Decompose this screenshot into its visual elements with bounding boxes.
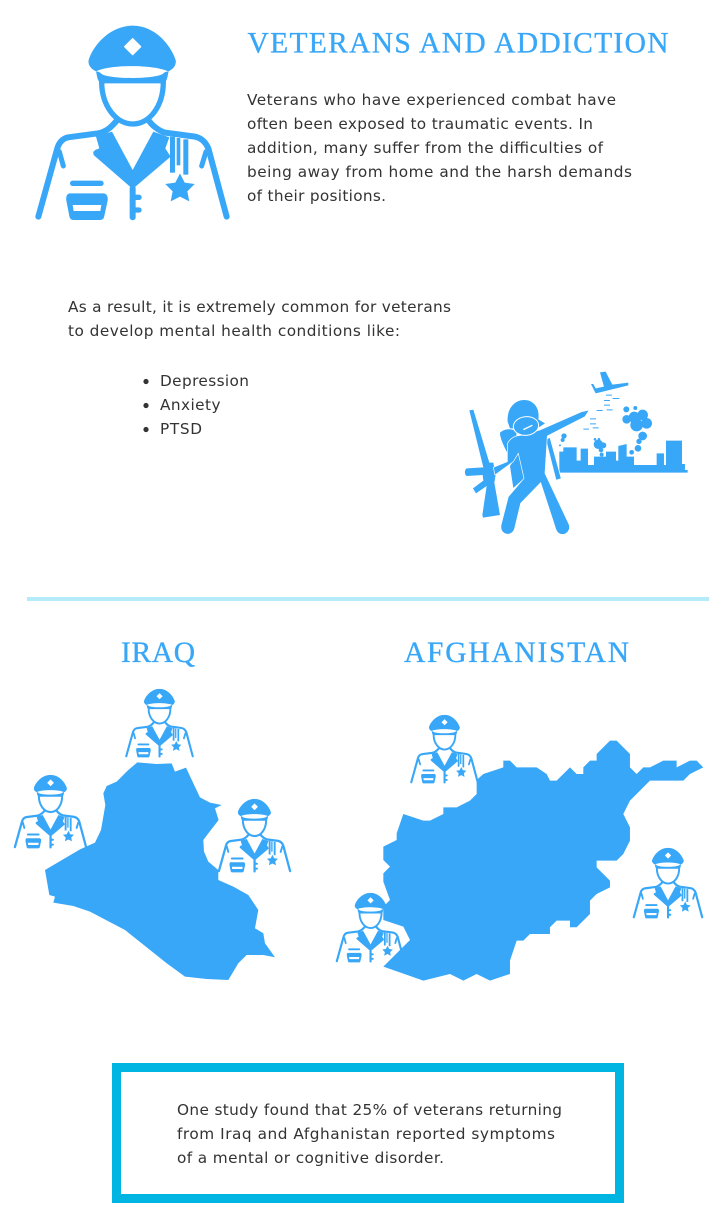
bag strip — [546, 437, 561, 480]
divider line — [27, 597, 709, 601]
text block: combat exposure: often been exposed to traumatic events. In — [247, 115, 593, 133]
heading: Afghanistan: AFGHANISTAN — [404, 637, 629, 669]
callout: study finding: One study found that 25% of veterans returning — [177, 1101, 562, 1119]
icon: soldier pointing at bombed city — [465, 372, 688, 534]
text block: combat exposure: addition, many suffer from the difficulties of — [247, 139, 604, 157]
bullet list: conditions: Anxiety — [160, 396, 220, 414]
map: Afghanistan — [383, 741, 703, 981]
backpack — [500, 429, 517, 452]
text block: combat exposure — [247, 91, 632, 205]
heading: Iraq: IRAQ — [121, 637, 195, 669]
airplane — [591, 372, 628, 393]
text block: mental health intro — [68, 298, 451, 340]
callout: study finding — [116, 1068, 620, 1198]
text block: mental health intro: to develop mental health conditions like: — [68, 322, 400, 340]
icon: soldier right of Iraq — [219, 799, 290, 872]
soldier body — [493, 410, 589, 534]
rifle — [465, 410, 500, 518]
icon: soldier south-west of Afghanistan — [337, 893, 404, 962]
text block: combat exposure: being away from home and the harsh demands — [247, 163, 632, 181]
text block: combat exposure: Veterans who have experienced combat have — [247, 91, 616, 109]
smoke plume — [559, 406, 652, 457]
callout: study finding: of a mental or cognitive disorder. — [177, 1149, 444, 1167]
icon: soldier north-west of Afghanistan — [411, 715, 478, 783]
icon: soldier east of Afghanistan — [634, 848, 702, 918]
city skyline — [559, 441, 688, 473]
bullet list: conditions: Depression — [160, 372, 249, 390]
icon: soldier above Iraq — [126, 689, 193, 757]
falling bombs — [583, 395, 619, 430]
callout: study finding: from Iraq and Afghanistan reported symptoms — [177, 1125, 555, 1143]
icon: large soldier — [38, 26, 227, 220]
icon: soldier left of Iraq — [15, 775, 86, 848]
title: VETERANS AND ADDICTION — [248, 28, 668, 60]
bullet list: conditions — [143, 372, 249, 438]
text block: mental health intro: As a result, it is extremely common for veterans — [68, 298, 451, 316]
bullet list: conditions: PTSD — [160, 420, 202, 438]
map: Iraq — [45, 762, 275, 980]
text block: combat exposure: of their positions. — [247, 187, 386, 205]
helmet and face — [508, 400, 545, 437]
